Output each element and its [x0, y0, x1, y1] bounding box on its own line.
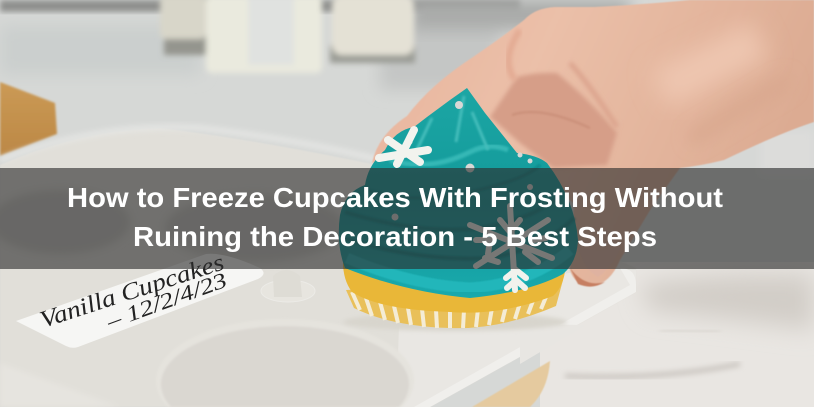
palm shadow between fingers and thumb [490, 73, 617, 168]
plastic storage tray [0, 127, 636, 407]
title: How to Freeze Cupcakes With Frosting Without [67, 182, 723, 213]
title: Ruining the Decoration - 5 Best Steps [133, 221, 657, 252]
white snowflake decoration [379, 130, 428, 164]
label: Vanilla Cupcakes: – 12/2/4/23 [102, 267, 230, 334]
tray cavity [156, 319, 414, 407]
title banner [0, 168, 814, 269]
teal frosting swirl [339, 88, 578, 298]
lower cupcake in tray [472, 361, 550, 407]
cupcake [339, 88, 578, 331]
jars in the background [160, 0, 415, 73]
tray knob [261, 270, 315, 302]
label: Vanilla Cupcakes [16, 250, 264, 348]
thumb nail [578, 246, 621, 277]
wooden block [0, 82, 57, 156]
cupcake sponge [343, 258, 566, 313]
hand holding cupcake [372, 0, 814, 287]
silver pearls [392, 101, 533, 220]
grey-white snowflake decoration [470, 206, 552, 290]
shadow on tray [343, 313, 567, 331]
cupcake wrapper [346, 280, 563, 328]
label: Vanilla Cupcakes: Vanilla Cupcakes [37, 250, 227, 334]
title [67, 182, 723, 252]
